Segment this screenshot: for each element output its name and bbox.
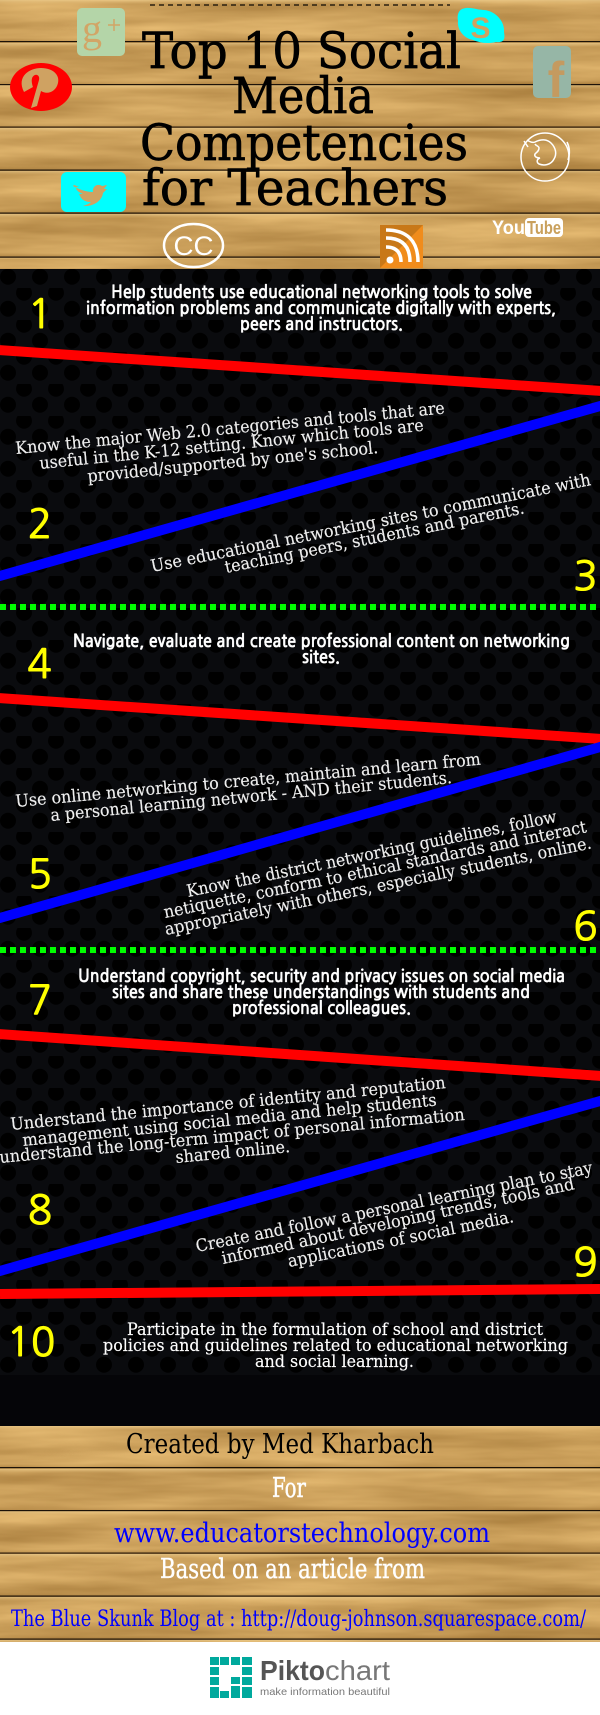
logo tagline: make information beautiful — [260, 1686, 390, 1698]
blue divider 1 — [0, 406, 600, 576]
competency 2 text — [15, 399, 446, 487]
competency 10 text: and social learning. — [255, 1352, 414, 1372]
for label: For — [272, 1473, 306, 1504]
icon: pinterest — [10, 63, 72, 111]
competency 5 text: Use online networking to create, maintain and learn from — [15, 750, 482, 812]
competency 1 text: Help students use educational networking tools to solve — [111, 283, 532, 301]
panel: competencies 7 to 10 — [0, 967, 600, 1372]
number 6: 6 — [573, 906, 598, 946]
competency 10 text — [103, 1320, 568, 1372]
title: Top 10 Social — [142, 22, 461, 80]
panel: competencies 1 to 3 — [0, 283, 600, 607]
number 4: 4 — [27, 644, 52, 684]
panel: competencies 4 to 6 — [0, 632, 600, 950]
competency 2 text: useful in the K-12 setting. Know which tools are — [39, 416, 425, 474]
competency 3 text: teaching peers, students and parents. — [223, 499, 526, 578]
icon: creative commons — [164, 224, 223, 267]
icon: youtube — [492, 218, 563, 239]
green dotted divider 1 — [0, 604, 600, 610]
logo wordmark: Pikto — [260, 1655, 325, 1686]
icon: creative commons: CC — [174, 231, 214, 261]
website url: www.educatorstechnology.com — [114, 1518, 490, 1549]
competency 2 text: provided/supported by one's school. — [87, 438, 379, 487]
blue divider 2 — [0, 746, 600, 918]
icon: skype: S — [470, 12, 491, 45]
icon: skype — [458, 8, 504, 45]
competency 7 text: sites and share these understandings with students and — [112, 983, 530, 1001]
logo mark — [210, 1657, 252, 1698]
competency 1 text — [86, 283, 556, 333]
competency 7 text: professional colleagues. — [232, 999, 411, 1017]
dark panel: competencies — [0, 269, 600, 1426]
number 7: 7 — [28, 980, 52, 1020]
competency 4 text: sites. — [302, 648, 340, 666]
competency 5 text: a personal learning network - AND their students. — [50, 768, 453, 826]
number 1: 1 — [28, 294, 52, 334]
number 10: 10 — [7, 1322, 55, 1362]
article source label: Based on an article from — [160, 1554, 425, 1585]
creator credit: Created by Med Kharbach — [126, 1429, 434, 1460]
competency 9 text: applications of social media. — [286, 1207, 516, 1272]
title: Competencies — [140, 114, 468, 172]
icon: google plus: g — [82, 6, 102, 51]
competency 8 text: Understand the importance of identity and reputation — [10, 1073, 447, 1135]
number 3: 3 — [573, 556, 598, 596]
blue divider 3 — [0, 1100, 600, 1272]
red divider 2 — [0, 698, 600, 739]
header wood panel — [0, 0, 600, 269]
icon: rss — [380, 225, 423, 268]
competency 1 text: information problems and communicate digitally with experts, — [86, 299, 556, 317]
logo wordmark light: chart — [325, 1655, 390, 1686]
number 5: 5 — [28, 854, 52, 894]
bottom dark strip without dots — [0, 1375, 600, 1426]
title: for Teachers — [142, 159, 448, 217]
icon: youtube: You — [492, 218, 525, 239]
icon: facebook: f — [548, 52, 565, 108]
competency 4 text: Navigate, evaluate and create professional content on networking — [73, 632, 570, 650]
piktochart logo — [210, 1655, 390, 1698]
competency 10 text: policies and guidelines related to educational networking — [103, 1336, 568, 1356]
competency 1 text: peers and instructors. — [240, 315, 403, 333]
icon: facebook — [533, 46, 571, 108]
competency 6 text: Know the district networking guidelines, follow — [185, 807, 559, 902]
competency 9 text: informed about developing trends, tools and — [220, 1174, 576, 1269]
icon: youtube: Tube — [527, 218, 561, 238]
competency 4 text — [73, 632, 570, 666]
red divider 3 — [0, 1034, 600, 1076]
icon: twitter — [61, 172, 126, 212]
competency 8 text: understand the long-term impact of personal information — [0, 1105, 466, 1168]
footer credits — [11, 1429, 586, 1632]
red divider 1 — [0, 350, 600, 391]
title — [140, 22, 468, 217]
icon: firefox — [521, 133, 569, 181]
icon: google plus — [77, 6, 125, 56]
title: Media — [232, 67, 374, 125]
footer wood panel — [0, 1426, 600, 1642]
green dotted divider 2 — [0, 947, 600, 953]
competency 7 text — [78, 967, 565, 1017]
number 8: 8 — [28, 1190, 52, 1230]
competency 8 text: shared online. — [175, 1137, 291, 1168]
competency 8 text — [0, 1073, 466, 1168]
red divider 4 — [0, 1289, 600, 1294]
competency 8 text: management using social media and help students — [22, 1090, 438, 1151]
competency 2 text: Know the major Web 2.0 categories and tools that are — [15, 399, 446, 459]
number 9: 9 — [573, 1242, 598, 1282]
number 2: 2 — [28, 504, 52, 544]
competency 7 text: Understand copyright, security and privacy issues on social media — [78, 967, 565, 985]
competency 10 text: Participate in the formulation of school and district — [127, 1320, 543, 1340]
